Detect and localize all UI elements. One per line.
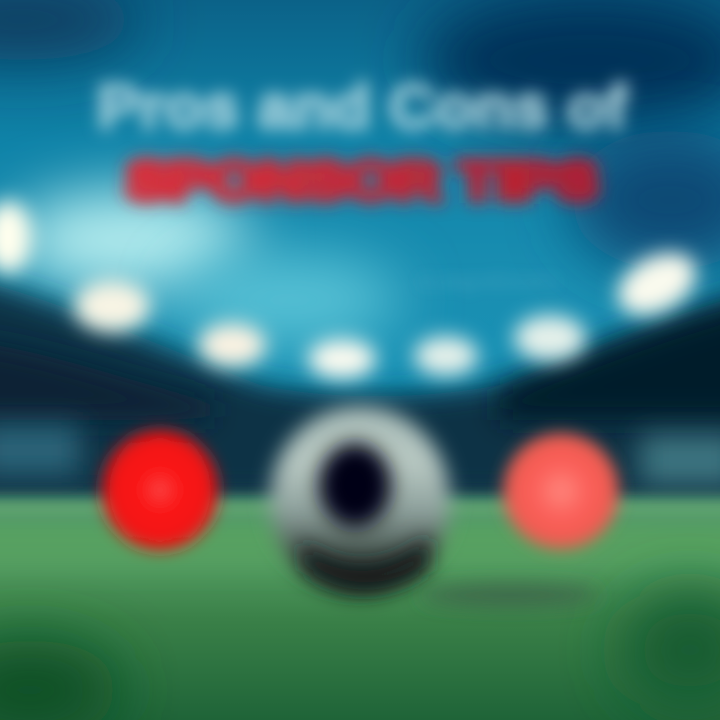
stadium floodlights	[0, 201, 707, 379]
ball shadow on the grass	[420, 585, 600, 605]
title: Pros and Cons of: Pros and Cons of	[97, 73, 627, 142]
faint caption in the sky: caption	[418, 268, 558, 293]
icon: soccer ball	[270, 406, 450, 594]
subtitle: red highlighted tips line: SPONSOR TIPS	[126, 151, 598, 211]
icon: coral circle (cons)	[503, 433, 619, 549]
icon: red circle (pros)	[102, 430, 218, 550]
